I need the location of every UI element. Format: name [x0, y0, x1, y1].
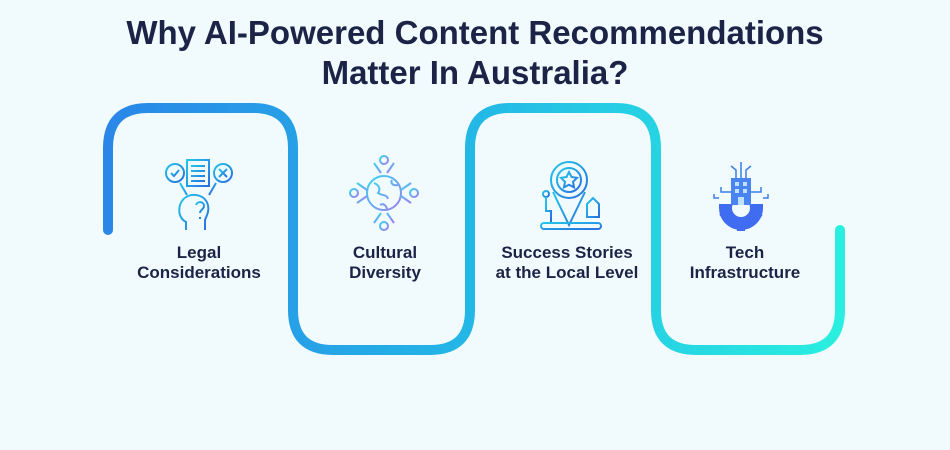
label: cultural: Cultural	[353, 243, 417, 262]
label: tech: Tech	[726, 243, 764, 262]
label: success: Success Stories	[501, 243, 633, 262]
label: legal: Considerations	[137, 263, 261, 282]
icon: legal	[166, 160, 232, 230]
title: Why AI-Powered Content Recommendations	[126, 14, 824, 51]
title	[126, 14, 824, 91]
icon: tech infrastructure	[714, 162, 768, 231]
wave path connector	[108, 108, 840, 350]
icon: success stories	[541, 162, 601, 229]
label: success	[496, 243, 638, 282]
label: cultural	[349, 243, 421, 282]
label: success: at the Local Level	[496, 263, 638, 282]
label: tech: Infrastructure	[690, 263, 800, 282]
label: tech	[690, 243, 800, 282]
label: legal: Legal	[177, 243, 221, 262]
icon: cultural diversity	[350, 156, 418, 230]
title: Matter In Australia?	[322, 54, 628, 91]
label: cultural: Diversity	[349, 263, 421, 282]
label: legal	[137, 243, 800, 282]
